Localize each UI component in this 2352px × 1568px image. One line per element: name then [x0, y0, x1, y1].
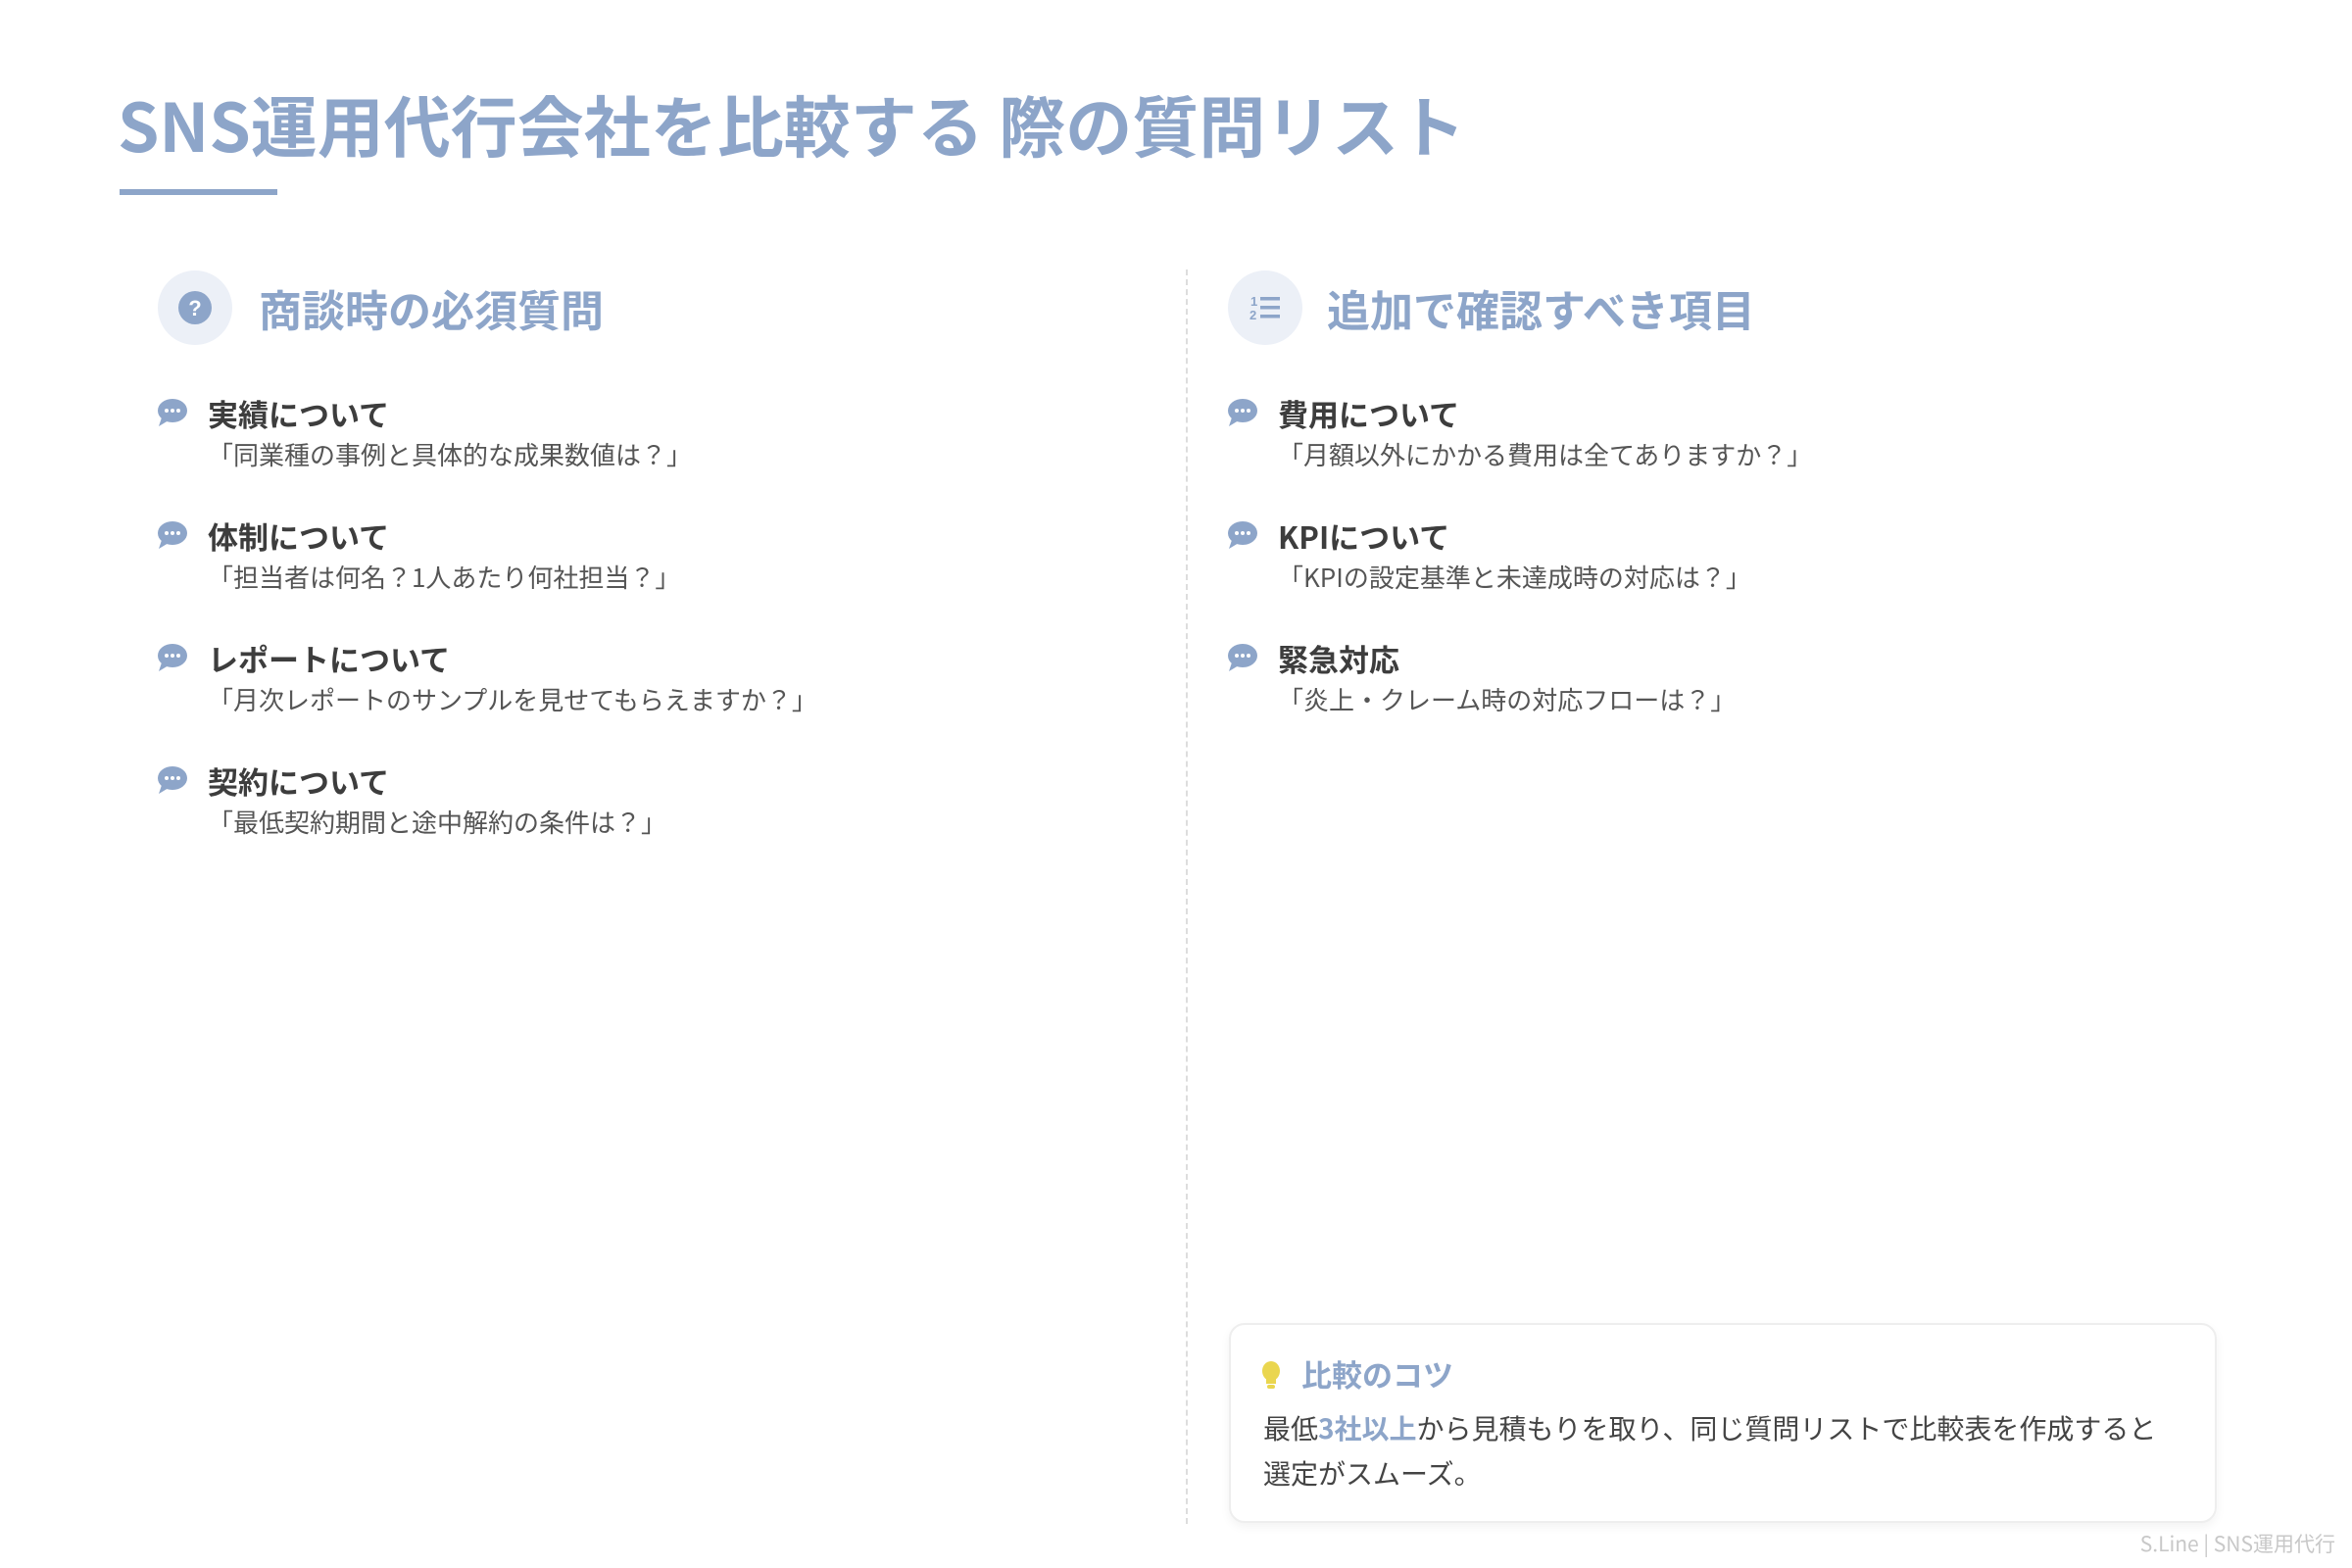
panel: essential questions	[158, 270, 817, 840]
item: 体制: 「担当者は何名？1人あたり何社担当？」	[208, 559, 680, 595]
item: 実績: 実績について	[208, 391, 389, 435]
item: 体制: 体制について	[208, 514, 389, 558]
item: 実績: 「同業種の事例と具体的な成果数値は？」	[208, 436, 692, 472]
item: 契約	[158, 759, 666, 840]
tip body: 最低3社以上から見積もりを取り、同じ質問リストで比較表を作成すると	[1263, 1408, 2156, 1447]
item: 契約: 契約について	[208, 759, 389, 803]
item: 緊急対応: 「炎上・クレーム時の対応フローは？」	[1278, 681, 1736, 717]
icon: numbered list	[1228, 270, 1302, 345]
icon: numbered list: 2	[1250, 308, 1256, 322]
item: 体制	[158, 514, 680, 595]
item: レポート	[158, 636, 817, 717]
icon: bulb	[1262, 1361, 1280, 1389]
item: 実績	[158, 391, 692, 472]
tip heading: 比較のコツ	[1301, 1351, 1453, 1396]
item: 費用: 「月額以外にかかる費用は全てありますか？」	[1278, 436, 1812, 472]
item: レポート: 「月次レポートのサンプルを見せてもらえますか？」	[208, 681, 817, 717]
item: 費用	[1228, 391, 1812, 472]
heading: 商談時の必須質問	[259, 276, 604, 339]
icon: numbered list: 1	[1250, 294, 1257, 309]
tip body: 選定がスムーズ。	[1263, 1453, 1482, 1493]
item: 緊急対応: 緊急対応	[1278, 636, 1399, 680]
item: KPI: KPIについて	[1278, 514, 1449, 558]
divider	[1186, 270, 1188, 1524]
tip body	[1263, 1408, 2156, 1493]
item: レポート: レポートについて	[208, 636, 450, 680]
title: SNS運用代行会社を比較する 際の質問リスト	[118, 74, 1465, 172]
panel: additional items	[1228, 270, 1812, 717]
icon: question	[158, 270, 232, 345]
callout: comparison tip	[1229, 1323, 2217, 1523]
item: 費用: 費用について	[1278, 391, 1459, 435]
item: KPI: 「KPIの設定基準と未達成時の対応は？」	[1278, 559, 1751, 595]
footer: S.Line | SNS運用代行	[2140, 1529, 2335, 1558]
icon: question: ?	[188, 296, 202, 320]
heading: 追加で確認すべき項目	[1327, 276, 1755, 339]
item: KPI	[1228, 514, 1751, 595]
item: 契約: 「最低契約期間と途中解約の条件は？」	[208, 804, 666, 840]
item: 緊急対応	[1228, 636, 1736, 717]
